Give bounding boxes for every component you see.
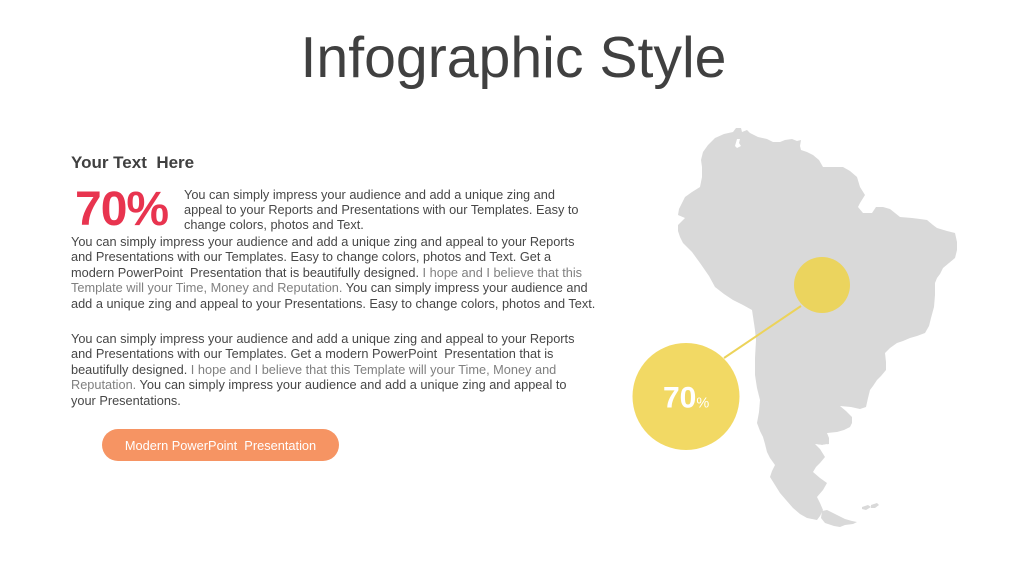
intro text beside percentage: change colors, photos and Text.: [184, 217, 364, 232]
second paragraph: You can simply impress your audience and add a unique zing and appeal to your Reports: [71, 331, 574, 346]
subheading: Your Text Here: [71, 153, 194, 172]
second paragraph: beautifully designed. I hope and I believe that this Template will your Time, Money and: [71, 362, 556, 377]
second paragraph: and Presentations with our Templates. Get a modern PowerPoint Presentation that is: [71, 346, 553, 361]
second paragraph: your Presentations.: [71, 393, 181, 408]
second paragraph: Reputation. You can simply impress your audience and add a unique zing and appeal to: [71, 377, 566, 392]
marker circle on map: [794, 257, 850, 313]
first paragraph: add a unique zing and appeal to your Presentations. Easy to change colors, photos and Text.: [71, 296, 595, 311]
button: Modern PowerPoint Presentation: [102, 429, 339, 461]
intro text beside percentage: appeal to your Reports and Presentations with our Templates. Easy to: [184, 202, 579, 217]
second paragraph: [71, 331, 574, 408]
first paragraph: modern PowerPoint Presentation that is beautifully designed. I hope and I believe that this: [71, 265, 582, 280]
intro text beside percentage: You can simply impress your audience and add a unique zing and: [184, 186, 555, 202]
map: coastal notches: [735, 139, 827, 448]
first paragraph: and Presentations with our Templates. Easy to change colors, photos and Text. Get a: [71, 249, 551, 264]
callout value: 70%: [663, 382, 709, 414]
intro text beside percentage: [184, 186, 579, 232]
big red percentage: 70%: [75, 183, 168, 236]
connector line: [724, 306, 801, 358]
map: continent silhouette: [678, 128, 957, 527]
first paragraph: [71, 234, 595, 311]
callout circle: [632, 343, 740, 450]
title: Infographic Style: [300, 26, 726, 90]
first paragraph: You can simply impress your audience and add a unique zing and appeal to your Reports: [71, 234, 574, 249]
button: Modern PowerPoint Presentation: Modern PowerPoint Presentation: [125, 438, 316, 453]
first paragraph: Template will your Time, Money and Reputation. You can simply impress your audience and: [71, 280, 588, 295]
